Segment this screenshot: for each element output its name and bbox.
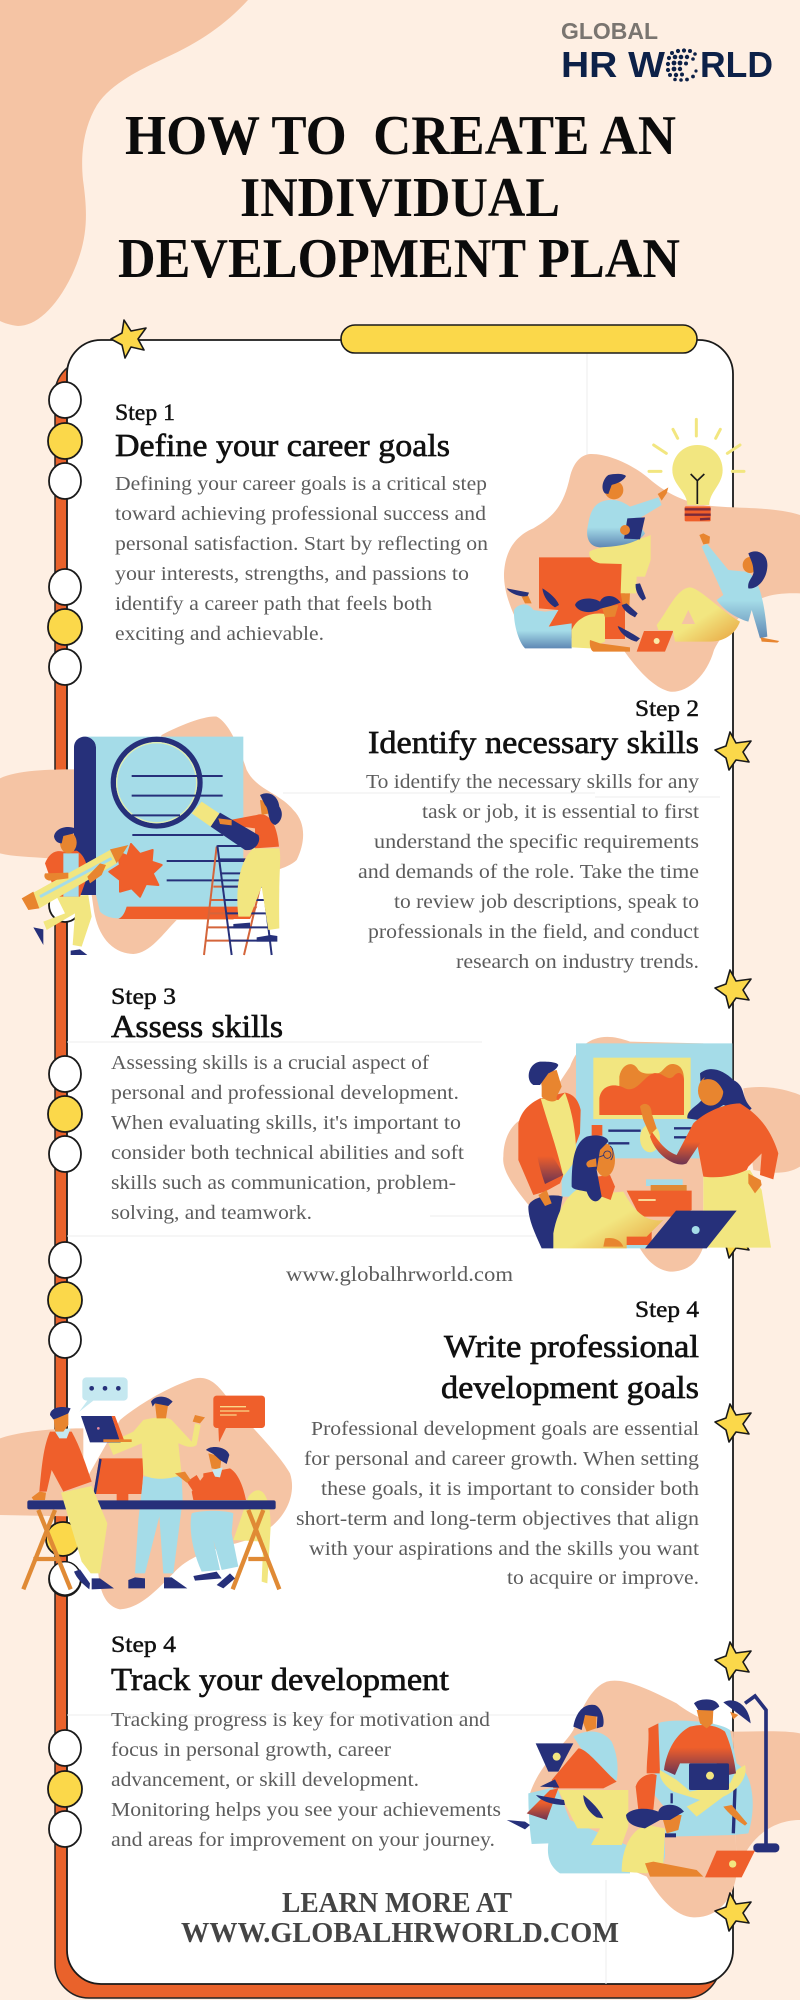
- panel: main white card: [67, 340, 733, 1984]
- title: DEVELOPMENT PLAN: [118, 228, 680, 290]
- person lying on the floor: [507, 588, 640, 652]
- step 5 heading: Track your development: [111, 1661, 449, 1697]
- desk trestles: [23, 1510, 279, 1589]
- step 4 body: with your aspirations and the skills you want: [309, 1538, 699, 1560]
- step 1 label: Step 1: [115, 400, 175, 425]
- blob: [504, 454, 800, 692]
- binder rings: group 6: [48, 1730, 82, 1847]
- step 3 heading: Assess skills: [111, 1008, 283, 1044]
- step 1 body: toward achieving professional success and: [115, 503, 486, 525]
- step 2 body: and demands of the role. Take the time: [358, 861, 699, 883]
- star: step 5 top: [715, 1642, 751, 1680]
- call to action: WWW.GLOBALHRWORLD.COM: [181, 1917, 619, 1949]
- step 2 body: To identify the necessary skills for any: [366, 771, 699, 793]
- navy laptop: [645, 1211, 737, 1248]
- man standing at centre: [108, 1397, 205, 1588]
- woman with laptop on cube: [507, 1705, 618, 1829]
- left blob: [0, 769, 75, 858]
- step 4 body: for personal and career growth. When setting: [304, 1448, 699, 1470]
- binder ring: behind step 2 illustration: [49, 888, 81, 922]
- logo: Global HR World: [561, 18, 773, 85]
- step 2 body: understand the specific requirements: [374, 831, 699, 853]
- step 4 body: [296, 1418, 699, 1589]
- main blob: [530, 1681, 737, 1917]
- person with pencil: [22, 827, 128, 955]
- step 3 body: When evaluating skills, it's important to: [111, 1112, 461, 1134]
- step 2 body: research on industry trends.: [456, 951, 699, 973]
- step 1 heading: Define your career goals: [115, 427, 450, 463]
- monitor: [93, 1458, 144, 1501]
- step 1 body: Defining your career goals is a critical step: [115, 473, 487, 495]
- person reclining: [657, 533, 779, 643]
- man leaning on desk: [32, 1407, 114, 1589]
- binder rings: group 4: [48, 1242, 82, 1358]
- file folder: [602, 1179, 692, 1248]
- main blob: [503, 1037, 703, 1272]
- man in armchair with laptop: [660, 1699, 747, 1826]
- right armchair: [636, 1721, 753, 1863]
- step 2 body: to review job descriptions, speak to: [394, 891, 699, 913]
- step 1 body: your interests, strengths, and passions to: [115, 563, 469, 585]
- logo word: RLD: RLD: [700, 44, 773, 85]
- logo icon: dotted globe: [666, 48, 698, 82]
- call to action: [181, 1887, 619, 1949]
- star: top of panel: [111, 320, 146, 358]
- yellow cube: [558, 1790, 628, 1845]
- presentation board: [576, 1043, 732, 1158]
- step 3 label: Step 3: [111, 984, 176, 1009]
- step 5 body: focus in personal growth, career: [111, 1739, 391, 1761]
- main blob: [67, 1378, 292, 1609]
- step 5 body: Tracking progress is key for motivation and: [111, 1709, 490, 1731]
- book: [74, 737, 257, 919]
- woman's shirt behind the magnifier: [230, 814, 279, 848]
- yellow pill tab: [341, 325, 697, 353]
- laptop on man's hand: [81, 1416, 132, 1442]
- orange starburst badge: [109, 844, 162, 897]
- orange laptop: [637, 631, 673, 652]
- seated woman with glasses: [553, 1135, 663, 1248]
- title: INDIVIDUAL: [240, 167, 560, 229]
- step 1 body: identify a career path that feels both: [115, 593, 432, 615]
- step 2 body: task or job, it is essential to first: [422, 801, 699, 823]
- step 3 body: Assessing skills is a crucial aspect of: [111, 1052, 429, 1074]
- step 5 label: Step 4: [111, 1632, 177, 1657]
- step 2 body: professionals in the field, and conduct: [368, 921, 699, 943]
- step 2 body: [358, 771, 699, 973]
- right blob: [743, 1087, 800, 1173]
- title: HOW TO CREATE AN: [125, 105, 676, 167]
- title: [118, 105, 680, 290]
- standing woman: [640, 1069, 778, 1248]
- star: step 3 top: [715, 970, 751, 1008]
- step 1 body: personal satisfaction. Start by reflecting on: [115, 533, 488, 555]
- step 4 heading: development goals: [441, 1369, 699, 1405]
- binder rings: group 2: [48, 569, 82, 685]
- seated man: [175, 1447, 246, 1588]
- main blob: [90, 716, 303, 954]
- step 4 body: short-term and long-term objectives that align: [296, 1508, 699, 1530]
- step 1 body: exciting and achievable.: [115, 623, 324, 645]
- step 3 body: skills such as communication, problem-: [111, 1172, 456, 1194]
- panel shadow: orange backing: [55, 360, 720, 1998]
- illustration: magnifying glass and book: [0, 716, 303, 955]
- speech bubble: blue: [79, 1377, 128, 1412]
- step 5 body: [111, 1709, 501, 1851]
- yellow chair: [233, 1490, 271, 1583]
- speech bubble: orange: [213, 1396, 265, 1442]
- step 3 body: consider both technical abilities and soft: [111, 1142, 464, 1164]
- background blob: top left: [0, 0, 248, 326]
- ladder: [204, 845, 272, 955]
- step 4 body: these goals, it is important to consider both: [321, 1478, 699, 1500]
- illustration: team reviewing a chart: [503, 1037, 800, 1272]
- star: step 4 right: [715, 1404, 751, 1442]
- orange box: [539, 557, 625, 639]
- binder rings behind illustration: [49, 1562, 81, 1595]
- step 2 heading: Identify necessary skills: [368, 724, 699, 760]
- logo word: HR W: HR W: [561, 44, 665, 85]
- step 4 body: Professional development goals are essential: [311, 1418, 699, 1440]
- left beanbag: [528, 1787, 630, 1873]
- step 5 body: and areas for improvement on your journey.: [111, 1829, 495, 1851]
- step 3 body: personal and professional development.: [111, 1082, 459, 1104]
- illustration: team at a desk: [0, 1377, 292, 1609]
- star: bottom right: [715, 1893, 751, 1931]
- magnifying glass: [113, 739, 259, 850]
- website link: www.globalhrworld.com: [286, 1262, 513, 1286]
- icon: light bulb: [649, 419, 744, 521]
- step 5 body: Monitoring helps you see your achievements: [111, 1799, 501, 1821]
- step 4 label: Step 4: [635, 1297, 700, 1322]
- binder rings: group 1: [48, 382, 82, 499]
- step 1 body: [115, 473, 488, 645]
- desk: [27, 1500, 276, 1509]
- step 3 body: solving, and teamwork.: [111, 1202, 312, 1224]
- binder rings: group 3: [48, 1056, 82, 1172]
- star: step 2: [715, 732, 751, 770]
- logo word: GLOBAL: GLOBAL: [561, 18, 658, 44]
- illustration: team reaching for a light bulb: [504, 419, 800, 692]
- step 4 body: to acquire or improve.: [507, 1567, 699, 1589]
- illustration: people working on laptops: [507, 1681, 800, 1917]
- woman lying with laptop: [622, 1805, 755, 1877]
- call to action: LEARN MORE AT: [282, 1887, 512, 1919]
- step 2 label: Step 2: [635, 696, 699, 721]
- man standing: [518, 1062, 581, 1248]
- right blob: [733, 1731, 800, 1873]
- left blob: [0, 1428, 83, 1517]
- step 4 heading: [441, 1328, 699, 1405]
- step 4 heading: Write professional: [444, 1328, 699, 1364]
- floor lamp: [723, 1696, 779, 1852]
- step 3 body: [111, 1052, 464, 1224]
- woman on ladder: [218, 793, 282, 942]
- step 5 body: advancement, or skill development.: [111, 1769, 419, 1791]
- binder rings: group 5: [46, 1522, 81, 1596]
- star: behind step 3 illustration: [715, 1220, 751, 1258]
- person sitting with tablet: [587, 474, 668, 617]
